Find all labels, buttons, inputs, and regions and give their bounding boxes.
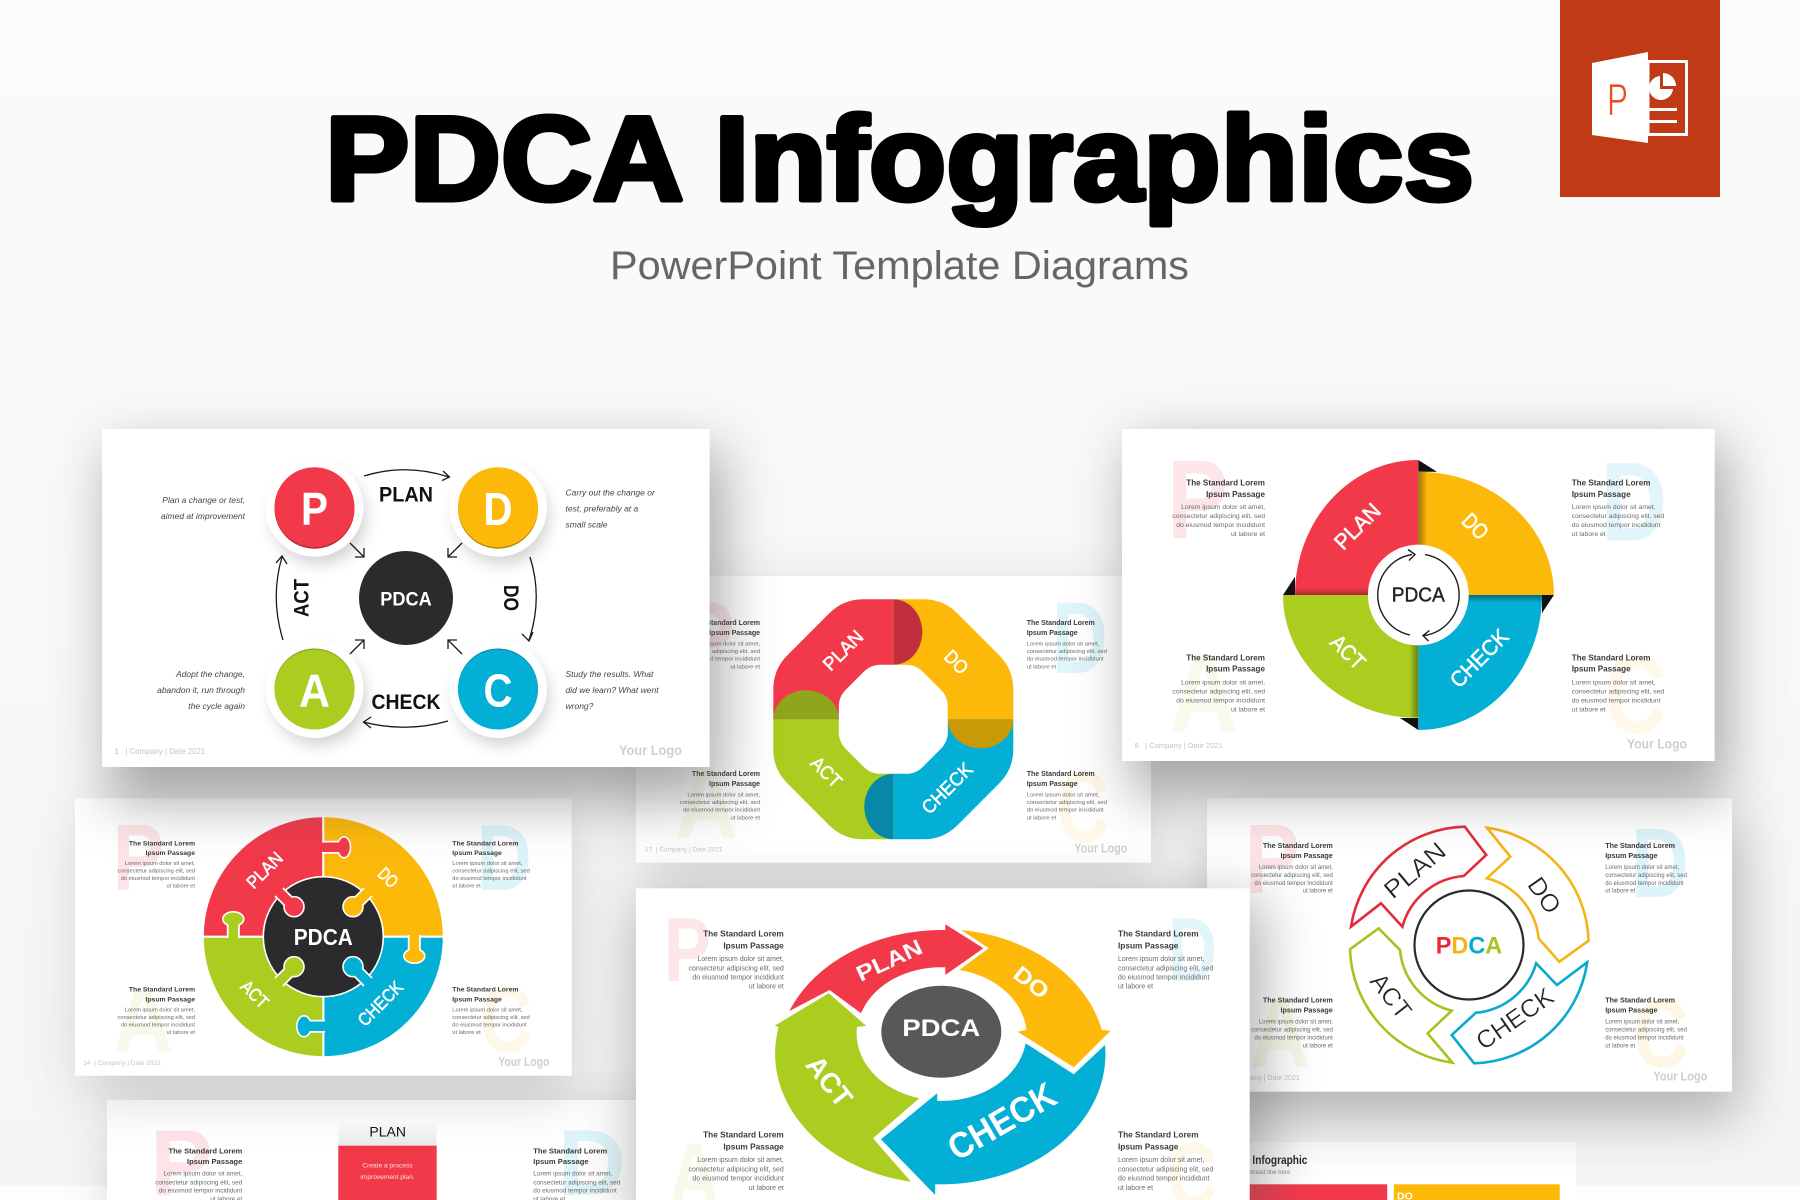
label PLAN: PLAN	[379, 484, 433, 507]
circle P: P	[301, 483, 328, 535]
octagon labels: PLAN	[819, 627, 868, 675]
text block top-left: Ipsum Passage	[709, 630, 760, 637]
text block bottom-right: The Standard Lorem	[1572, 653, 1650, 662]
text block top-right: consectetur adipiscing elit, sed	[1605, 873, 1687, 879]
watermark letters: D	[1052, 581, 1108, 695]
centre circle	[359, 551, 453, 645]
text block bottom-left: Ipsum Passage	[709, 781, 760, 788]
octagon ring	[773, 599, 1014, 840]
pinwheel diagram	[1283, 460, 1554, 730]
label ACT: ACT	[290, 579, 314, 617]
puzzle diagram	[203, 816, 444, 1057]
puzzle diagram: CHECK	[354, 977, 407, 1030]
text block bottom-left: The Standard Lorem	[129, 987, 195, 994]
slide panel	[75, 798, 572, 1076]
text block top-right: Lorem ipsum dolor sit amet,	[1605, 865, 1680, 871]
icon: PowerPoint logo	[1560, 0, 1720, 197]
text block top-right: consectetur adipiscing elit, sed	[1572, 513, 1664, 520]
text block top-left: consectetur adipiscing elit, sed	[1251, 873, 1333, 879]
text block top-left: ut labore et	[749, 984, 784, 991]
watermark letters	[1167, 437, 1667, 757]
note do: small scale	[566, 520, 608, 530]
text block top-right: Lorem ipsum dolor sit amet,	[452, 861, 523, 867]
coloured PDCA: PDCA	[1436, 932, 1502, 959]
footer: 1 | Company | Date 2021	[114, 747, 205, 756]
text block top-left: Lorem ipsum dolor sit amet,	[125, 861, 195, 867]
text block bottom-left: do eiusmod tempor incididunt	[692, 1176, 784, 1183]
text block bottom-left: consectetur adipiscing elit, sed	[688, 1166, 784, 1173]
text block bottom-left: ut labore et	[167, 1030, 195, 1036]
text block top-left: do eiusmod tempor incididunt	[1176, 522, 1265, 529]
text block top-left: Lorem ipsum dolor sit amet,	[1181, 504, 1265, 511]
slide: bottom-left PLAN table: The Standard Lorem	[533, 1146, 607, 1155]
arrows	[276, 470, 536, 728]
watermark letters: D	[1631, 808, 1689, 918]
text block top-left: do eiusmod tempor incididunt	[683, 657, 760, 663]
slide: bottom-left PLAN table	[107, 1100, 648, 1200]
watermark letters: D	[477, 805, 532, 910]
text block top-left: ut labore et	[1231, 531, 1265, 538]
title: PDCA Infographics	[325, 92, 1474, 226]
text block top-right: Ipsum Passage	[452, 850, 502, 857]
text block top-right: The Standard Lorem	[1572, 479, 1650, 488]
label CHECK: CHECK	[372, 691, 440, 714]
text block top-right: Lorem ipsum dolor sit amet,	[1572, 504, 1656, 511]
puzzle diagram: PDCA	[294, 924, 353, 950]
text block bottom-right: Lorem ipsum dolor sit amet,	[452, 1007, 523, 1013]
watermark letters: C	[480, 967, 532, 1072]
text block bottom-right: Lorem ipsum dolor sit amet,	[1605, 1020, 1680, 1026]
text block bottom-right: Ipsum Passage	[1118, 1141, 1179, 1151]
text block bottom-left: Lorem ipsum dolor sit amet,	[1259, 1020, 1333, 1026]
circle D: D	[484, 483, 512, 535]
text block top-right: ut labore et	[1027, 664, 1057, 670]
watermark letters: C	[1633, 978, 1689, 1088]
octagon labels: ACT	[806, 753, 846, 793]
text block top-right: do eiusmod tempor incididunt	[1605, 881, 1684, 887]
text block bottom-right: ut labore et	[1027, 815, 1057, 821]
centre label: PDCA	[380, 589, 432, 610]
text block top-left: ut labore et	[731, 664, 760, 670]
text block top-right: ut labore et	[1605, 889, 1636, 895]
text block bottom-left: Ipsum Passage	[1280, 1006, 1333, 1015]
arrow labels: CHECK	[940, 1074, 1063, 1168]
text block bottom-left: ut labore et	[1303, 1043, 1333, 1049]
slide shadow	[1130, 445, 1726, 795]
ring labels: PLAN	[1379, 837, 1452, 905]
octagon labels: CHECK	[918, 759, 978, 819]
slide: octagon	[636, 576, 1155, 877]
ring labels: DO	[1522, 872, 1566, 919]
text block top-left: do eiusmod tempor incididunt	[692, 974, 784, 981]
text block bottom-right: do eiusmod tempor incididunt	[1572, 697, 1661, 704]
text block top-left: ut labore et	[1303, 889, 1333, 895]
ring labels: ACT	[1364, 968, 1417, 1025]
slide panel	[1207, 798, 1732, 1092]
circle A: A	[299, 665, 330, 717]
watermark letters	[675, 581, 1109, 864]
watermark letters: P	[1245, 804, 1300, 914]
watermark letters: C	[1057, 750, 1109, 864]
text block top-right: The Standard Lorem	[1027, 620, 1095, 627]
note check: wrong?	[566, 701, 594, 711]
slide: bottom-left PLAN table: The Standard Lorem	[168, 1146, 243, 1155]
circle C	[449, 640, 549, 745]
circle A	[266, 640, 366, 745]
text block top-left: Ipsum Passage	[146, 850, 195, 857]
text block top-right: The Standard Lorem	[1605, 841, 1675, 850]
note plan: aimed at improvement	[161, 511, 246, 521]
text block bottom-right: ut labore et	[1572, 706, 1606, 713]
text block bottom-right: consectetur adipiscing elit, sed	[452, 1015, 530, 1021]
text block bottom-left: Ipsum Passage	[1206, 665, 1265, 674]
text block bottom-right: ut labore et	[452, 1030, 481, 1036]
text block bottom-right: do eiusmod tempor incididunt	[452, 1022, 527, 1028]
text block top-left: The Standard Lorem	[1186, 479, 1265, 488]
text block bottom-left: The Standard Lorem	[692, 771, 760, 778]
slide: bottom-right bars: Infographic	[1252, 1155, 1308, 1167]
ring labels	[1364, 837, 1566, 1056]
text block top-left: do eiusmod tempor incididunt	[121, 876, 195, 882]
text block bottom-right: The Standard Lorem	[1118, 1130, 1199, 1140]
text block bottom-left: ut labore et	[749, 1185, 784, 1192]
text block bottom-right: ut labore et	[1605, 1043, 1636, 1049]
arrow labels: DO	[1009, 961, 1054, 1004]
centre label: PDCA	[902, 1015, 980, 1042]
subtitle: PowerPoint Template Diagrams	[610, 244, 1189, 288]
logo text: Your Logo	[1653, 1069, 1707, 1084]
text block bottom-right: Lorem ipsum dolor sit amet,	[1572, 679, 1656, 686]
text block bottom-left: do eiusmod tempor incididunt	[121, 1022, 195, 1028]
slide: bottom-left PLAN table: Lorem ipsum dolor sit amet,	[163, 1171, 243, 1178]
watermark letters: D	[1601, 440, 1667, 565]
text block bottom-right: consectetur adipiscing elit, sed	[1027, 800, 1107, 806]
text block bottom-left: The Standard Lorem	[1186, 653, 1265, 662]
watermark letters: A	[1250, 978, 1310, 1088]
text block top-right: consectetur adipiscing elit, sed	[452, 869, 530, 875]
text block bottom-right: Lorem ipsum dolor sit amet,	[1027, 792, 1100, 798]
text block bottom-right: do eiusmod tempor incididunt	[1118, 1176, 1209, 1183]
slide panel	[1122, 429, 1715, 761]
puzzle diagram: DO	[374, 864, 402, 892]
pinwheel diagram: CHECK	[1445, 624, 1514, 693]
text block bottom-left: ut labore et	[1231, 706, 1265, 713]
arrow DO	[959, 930, 1111, 1067]
arrow outline DO	[1487, 828, 1589, 962]
footer: 17 | Company | Date 2021	[645, 847, 723, 854]
watermark letters	[1245, 804, 1689, 1088]
slide shadow	[110, 450, 722, 802]
text block top-left: consectetur adipiscing elit, sed	[118, 869, 195, 875]
logo text: Your Logo	[1074, 841, 1127, 856]
slide: bottom-left PLAN table: consectetur adipiscing elit, sed	[533, 1179, 621, 1186]
arrow labels: PLAN	[852, 934, 926, 987]
text block top-right: Lorem ipsum dolor sit amet,	[1118, 956, 1204, 963]
text block bottom-left: consectetur adipiscing elit, sed	[118, 1015, 195, 1021]
text block bottom-left: Ipsum Passage	[146, 996, 195, 1003]
arrow ACT	[775, 993, 919, 1182]
puzzle diagram: ACT	[237, 976, 273, 1012]
text block top-left: Lorem ipsum dolor sit amet,	[1259, 865, 1333, 871]
text block bottom-left: do eiusmod tempor incididunt	[683, 808, 760, 814]
slide: bottom-left PLAN table: improvement plan.	[360, 1174, 415, 1181]
text block top-right: do eiusmod tempor incididunt	[1118, 974, 1209, 981]
pinwheel diagram: ACT	[1325, 629, 1371, 675]
text block top-right: consectetur adipiscing elit, sed	[1118, 965, 1213, 972]
text block top-left: Lorem ipsum dolor sit amet,	[687, 641, 760, 647]
puzzle diagram: PLAN	[242, 848, 287, 893]
slide shadow	[645, 592, 1155, 877]
text block top-right: consectetur adipiscing elit, sed	[1027, 649, 1107, 655]
text block top-right: The Standard Lorem	[1118, 929, 1199, 939]
text block top-left: The Standard Lorem	[703, 929, 784, 939]
text block top-right: do eiusmod tempor incididunt	[1572, 522, 1661, 529]
watermark letters: A	[1169, 631, 1238, 756]
text block bottom-right: Ipsum Passage	[1605, 1006, 1658, 1015]
slide: outline arrows	[1207, 798, 1740, 1118]
arrow CHECK	[881, 1043, 1105, 1195]
circle C: C	[484, 665, 512, 717]
text block bottom-left: Ipsum Passage	[723, 1141, 784, 1151]
slide: cycle arrows (front)	[636, 888, 1264, 1200]
ring labels: CHECK	[1471, 982, 1559, 1056]
slide panel	[636, 576, 1151, 863]
text block bottom-right: Ipsum Passage	[452, 996, 502, 1003]
slide: bottom-left PLAN table: do eiusmod tempor incididunt	[533, 1188, 617, 1195]
arrow outline ACT	[1350, 928, 1452, 1063]
text block bottom-left: Lorem ipsum dolor sit amet,	[125, 1007, 195, 1013]
note plan: Plan a change or test,	[162, 495, 245, 505]
text block bottom-right: Ipsum Passage	[1572, 665, 1631, 674]
slide: bottom-left PLAN table: consectetur adipiscing elit, sed	[155, 1179, 243, 1186]
text block bottom-right: consectetur adipiscing elit, sed	[1605, 1028, 1687, 1034]
text block top-right: Ipsum Passage	[1118, 940, 1179, 950]
text block bottom-left: consectetur adipiscing elit, sed	[680, 800, 760, 806]
text block bottom-right: do eiusmod tempor incididunt	[1027, 808, 1104, 814]
text block top-right: ut labore et	[1572, 531, 1606, 538]
footer: 8 | Company | Date 2021	[1134, 741, 1223, 750]
text block bottom-right: The Standard Lorem	[452, 987, 518, 994]
arrow labels	[800, 934, 1063, 1168]
text block bottom-left: do eiusmod tempor incididunt	[1176, 697, 1265, 704]
text block top-right: Lorem ipsum dolor sit amet,	[1027, 641, 1100, 647]
label DO: DO	[499, 585, 522, 611]
octagon labels: DO	[939, 646, 972, 679]
text block bottom-left: The Standard Lorem	[1263, 996, 1333, 1005]
watermark letters	[113, 804, 532, 1072]
centre ellipse	[881, 986, 1001, 1078]
logo text: Your Logo	[1627, 735, 1687, 751]
octagon labels	[806, 627, 978, 819]
icon: PowerPoint logo: P	[1607, 74, 1628, 125]
note check: did we learn? What went	[566, 685, 659, 695]
slide: pinwheel	[1122, 429, 1726, 795]
text block bottom-left: Lorem ipsum dolor sit amet,	[1181, 679, 1265, 686]
footer: | Company | Date 2021	[1228, 1075, 1300, 1082]
watermark letters: P	[1167, 437, 1228, 562]
slide: puzzle	[75, 798, 572, 1095]
arrow labels: ACT	[800, 1050, 859, 1113]
text block top-left: consectetur adipiscing elit, sed	[688, 965, 784, 972]
text block top-left: The Standard Lorem	[692, 620, 760, 627]
text block top-right: do eiusmod tempor incididunt	[1027, 657, 1104, 663]
slide shadow	[82, 815, 572, 1095]
watermark letters: A	[113, 967, 173, 1072]
note act: the cycle again	[188, 701, 245, 711]
slide: bottom-right bars	[1200, 1142, 1576, 1200]
arrow PLAN	[789, 924, 983, 1013]
pinwheel diagram: PDCA	[1392, 585, 1445, 607]
logo text: Your Logo	[498, 1055, 550, 1069]
slide shadow	[636, 900, 1264, 1200]
slide: bottom-left PLAN table: do eiusmod tempor incididunt	[159, 1188, 243, 1195]
text block top-left: Ipsum Passage	[723, 940, 784, 950]
text block bottom-left: Lorem ipsum dolor sit amet,	[697, 1157, 784, 1164]
text block bottom-left: Lorem ipsum dolor sit amet,	[687, 792, 760, 798]
note act: Adopt the change,	[175, 669, 245, 679]
text block top-left: Lorem ipsum dolor sit amet,	[697, 956, 784, 963]
text block bottom-left: consectetur adipiscing elit, sed	[1251, 1028, 1333, 1034]
text block bottom-right: Ipsum Passage	[1027, 781, 1078, 788]
slide: P D C A circles	[102, 429, 722, 802]
slide: bottom-left PLAN table: Lorem ipsum dolor sit amet,	[533, 1171, 612, 1178]
text block bottom-right: The Standard Lorem	[1605, 996, 1675, 1005]
text block bottom-right: The Standard Lorem	[1027, 771, 1095, 778]
text block top-right: Ipsum Passage	[1572, 490, 1631, 499]
text block bottom-left: The Standard Lorem	[703, 1130, 784, 1140]
text block top-left: do eiusmod tempor incididunt	[1254, 881, 1333, 887]
note act: abandon it, run through	[157, 685, 245, 695]
text block top-left: ut labore et	[167, 884, 195, 890]
slide panel	[636, 888, 1250, 1200]
slide: bottom-left PLAN table: Ipsum Passage	[533, 1157, 589, 1166]
text block top-left: The Standard Lorem	[1263, 841, 1333, 850]
circle D	[449, 459, 549, 564]
arrow outline PLAN	[1351, 827, 1486, 927]
text block top-right: The Standard Lorem	[452, 840, 518, 847]
circle P	[266, 459, 366, 564]
text block top-right: Ipsum Passage	[1027, 630, 1078, 637]
watermark letters: P	[677, 581, 735, 695]
text block bottom-left: do eiusmod tempor incididunt	[1254, 1036, 1333, 1042]
text block top-left: consectetur adipiscing elit, sed	[1172, 513, 1265, 520]
note check: Study the results. What	[566, 669, 654, 679]
text block bottom-left: consectetur adipiscing elit, sed	[1172, 688, 1265, 695]
watermark letters: D	[1168, 900, 1217, 1001]
watermark letters	[664, 900, 1217, 1200]
slide: bottom-left PLAN table: PLAN	[369, 1124, 406, 1140]
text block top-right: ut labore et	[1118, 984, 1153, 991]
note do: test, preferably at a	[566, 504, 639, 514]
text block bottom-right: do eiusmod tempor incididunt	[1605, 1036, 1684, 1042]
text block top-left: Ipsum Passage	[1280, 851, 1333, 860]
centre ring	[1414, 890, 1524, 1000]
text block top-right: Ipsum Passage	[1605, 851, 1658, 860]
text block bottom-left: ut labore et	[731, 815, 760, 821]
watermark letters: P	[664, 900, 711, 1001]
text block bottom-right: consectetur adipiscing elit, sed	[1118, 1166, 1213, 1173]
pinwheel diagram: DO	[1457, 508, 1494, 545]
watermark letters: A	[675, 746, 738, 860]
bottom white strip	[0, 1186, 1800, 1200]
text block bottom-right: ut labore et	[1118, 1185, 1153, 1192]
footer: 14 | Company | Date 2021	[83, 1060, 161, 1067]
text block top-right: do eiusmod tempor incididunt	[452, 876, 527, 882]
note do: Carry out the change or	[566, 488, 656, 498]
slide panel	[102, 429, 710, 767]
watermark letters: C	[1604, 632, 1667, 757]
text block bottom-right: consectetur adipiscing elit, sed	[1572, 688, 1664, 695]
watermark letters: P	[113, 804, 164, 909]
logo text: Your Logo	[619, 742, 682, 758]
slide shadow	[1215, 818, 1740, 1118]
text block top-left: Ipsum Passage	[1206, 490, 1265, 499]
slide: bottom-left PLAN table: Ipsum Passage	[187, 1157, 242, 1166]
arrow outline CHECK	[1452, 962, 1587, 1063]
slide: bottom-left PLAN table: Create a process	[362, 1163, 413, 1170]
text block bottom-right: Lorem ipsum dolor sit amet,	[1118, 1157, 1204, 1164]
text block top-right: ut labore et	[452, 884, 481, 890]
text block top-left: The Standard Lorem	[129, 840, 195, 847]
slide: bottom-right bars: Subhead line here	[1242, 1170, 1291, 1176]
pinwheel diagram: PLAN	[1329, 498, 1386, 555]
text block top-left: consectetur adipiscing elit, sed	[680, 649, 760, 655]
